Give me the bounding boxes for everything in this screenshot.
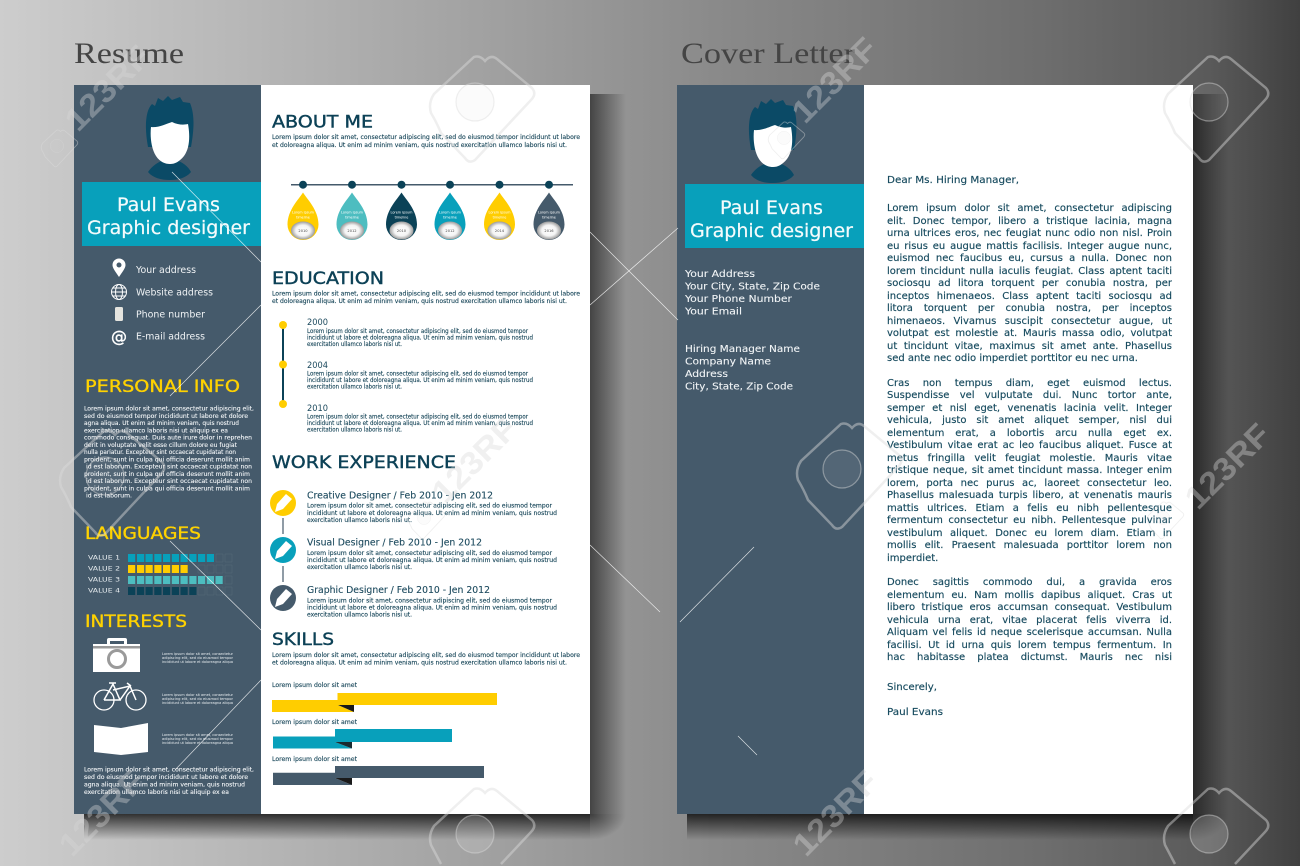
sidebar footer text: exercitation ullamco laboris nisi ut aliquip ex ea	[84, 789, 229, 796]
icon: pencil yellow	[270, 490, 296, 516]
timeline item 2014: timeline	[493, 216, 506, 220]
letter paragraph 1: Lorem ipsum dolor sit amet, consectetur adipiscing	[887, 203, 1172, 214]
skill bar teal: Lorem ipsum dolor sit amet	[272, 719, 358, 726]
letter paragraph 2: semper et nisl eget, venenatis lacinia velit. Integer	[887, 402, 1172, 414]
interests captions: Lorem ipsum dolor sit amet, consectetur	[162, 652, 234, 656]
timeline item 2012 teal: 2012	[445, 229, 455, 233]
title: Resume: Resume	[74, 37, 184, 70]
personal info text: proident, sunt in culpa qui officia deserunt mollit anim	[84, 485, 250, 492]
letter paragraph 1: elit. Donec tempor, libero a tristique lacinia, magna	[887, 216, 1172, 226]
languages chart: VALUE 4	[88, 586, 120, 594]
letter paragraph 2: mattis ultrices. Etiam a felis eu nibh pellentesque	[887, 502, 1172, 514]
timeline with drops	[288, 181, 573, 240]
unfilled grid	[198, 554, 232, 595]
interests captions: Lorem ipsum dolor sit amet, consectetur	[162, 733, 234, 737]
icon: location pin	[112, 259, 126, 277]
personal info text	[84, 406, 254, 500]
letter paragraph 1: ut tincidunt vitae, maximus sit amet ante. Phasellus	[887, 340, 1172, 352]
education intro: et doloreagna aliqua. Ut enim ad minim veniam, quis nostrud exercitation ullamco laboris nisi ut.	[272, 298, 567, 305]
job: visual designer: Visual Designer / Feb 2010 - Jen 2012	[307, 538, 482, 548]
heading: education: EDUCATION	[272, 269, 384, 289]
skills intro	[272, 652, 580, 666]
letter paragraph 1: sed ante nec odio imperdiet porttitor eu nec urna.	[887, 353, 1138, 364]
languages chart	[88, 554, 232, 595]
education entry 2004: exercitation ullamco laboris nisi ut.	[307, 384, 402, 390]
work connectors	[282, 518, 284, 582]
letter paragraph 1: lorem tincidunt nulla iaculis feugiat. Class aptent taciti	[887, 266, 1172, 276]
timeline item 2010: 2010	[298, 229, 308, 233]
letter paragraph 3: elementum eu. Nam mollis dapibus aliquet. Cras ut	[887, 590, 1172, 600]
icon: open book	[94, 723, 148, 755]
recipient address	[685, 344, 800, 392]
personal info text: id est laborum. Excepteur sint occaecat cupidatat non	[86, 478, 252, 485]
personal info text: commodo consequat. Duis aute irure dolor in reprehen	[84, 434, 252, 442]
sidebar footer text: sed do eiusmod tempor incididunt ut labore et dolore	[84, 774, 248, 781]
personal info text: Lorem ipsum dolor sit amet, consectetur adipiscing elit,	[84, 406, 254, 412]
personal info text: agna aliqua. Ut enim ad minim veniam, quis nostrud	[84, 420, 239, 427]
cover sidebar	[677, 85, 864, 814]
interests captions: adipiscing elit, sed do eiusmod tempor	[162, 656, 234, 660]
education entry 2010: incididunt ut labore et doloreagna aliqua. Ut enim ad minim veniam, quis nostrud	[307, 420, 533, 427]
job: graphic designer: exercitation ullamco laboris nisi ut.	[307, 612, 412, 618]
interests captions: adipiscing elit, sed do eiusmod tempor	[162, 737, 234, 741]
icon: camera	[93, 638, 140, 672]
letter paragraph 2: vehicula, justo sit amet aliquet semper, nisl dui	[887, 415, 1172, 426]
timeline item 2010: timeline	[296, 216, 310, 220]
about me text: et doloreagna aliqua. Ut enim ad minim veniam, quis nostrud exercitation ullamco laboris nisi ut.	[272, 142, 567, 149]
icon: phone	[115, 307, 123, 321]
letter paragraph 3: Donec sagittis commodo dui, a gravida eros	[887, 577, 1172, 588]
timeline item 2012: 2012	[347, 229, 357, 233]
education entry 2004	[307, 361, 533, 390]
name banner: Graphic designer	[87, 217, 250, 239]
job: graphic designer: Lorem ipsum dolor sit amet, consectetur adipiscing elit, sed do eiusmod tempor	[307, 598, 552, 604]
timeline item 2010 dark: 2010	[397, 229, 407, 233]
cover name banner: Graphic designer	[690, 220, 853, 242]
sidebar footer text	[84, 766, 254, 796]
letter paragraph 2: elementum erat, a lobortis arcu nulla eget ex.	[887, 428, 1172, 438]
letter paragraph 2: tristique neque, sit amet tincidunt massa. Integer enim	[887, 465, 1172, 476]
icon: pencil slate	[270, 585, 296, 611]
education entry 2004: Lorem ipsum dolor sit amet, consectetur adipiscing elit, sed do eiusmod tempor	[307, 370, 528, 378]
sign-off: Sincerely,	[887, 682, 937, 693]
sender address	[684, 269, 820, 318]
letter paragraph 1	[887, 203, 1172, 368]
sign-off: Paul Evans	[887, 707, 943, 718]
letter paragraph 1: urna ultrices eros, nec feugiat nunc odio non nisl. Proin	[887, 228, 1172, 239]
letter paragraph 2: Suspendisse vel vulputate dui. Nunc tortor ante,	[887, 390, 1172, 401]
job: visual designer: Lorem ipsum dolor sit amet, consectetur adipiscing elit, sed do eiusmod tempor	[307, 550, 552, 557]
job: visual designer	[307, 538, 557, 571]
job: creative designer	[307, 490, 557, 524]
watermark overlay: 123RF	[784, 30, 884, 130]
languages chart: VALUE 2	[88, 564, 120, 572]
watermark overlay: 123RF	[424, 410, 524, 510]
heading: interests: INTERESTS	[85, 612, 187, 632]
sign-off	[887, 682, 943, 718]
timeline item 2012 teal: Lorem ipsum	[439, 210, 462, 214]
letter paragraph 3: hac habitasse platea dictumst. Mauris nec nisi	[887, 652, 1172, 663]
contact list: Your address	[135, 265, 196, 276]
about me text: Lorem ipsum dolor sit amet, consectetur adipiscing elit, sed do eiusmod tempor incididunt ut labore	[272, 134, 580, 141]
education intro	[272, 290, 580, 305]
recipient address: Hiring Manager Name	[685, 344, 800, 355]
skill bar yellow	[272, 682, 497, 712]
sender address: Your Address	[684, 269, 755, 280]
letter paragraph 1: sociosqu ad litora torquent per conubia nostra, per	[887, 278, 1172, 289]
job: creative designer: Creative Designer / Feb 2010 - Jen 2012	[307, 490, 493, 502]
heading: about me: ABOUT ME	[272, 112, 373, 132]
timeline item 2014	[484, 181, 515, 240]
education entry 2010: exercitation ullamco laboris nisi ut.	[307, 426, 402, 434]
value 1 bar	[128, 554, 214, 562]
timeline item 2012	[336, 181, 368, 240]
personal info text: derit in voluptate velit esse cillum dolore eu fugiat	[84, 442, 238, 449]
contact list: E-mail address	[136, 332, 205, 342]
job: visual designer: exercitation ullamco laboris nisi ut.	[307, 564, 412, 571]
timeline item 2016: timeline	[542, 216, 556, 220]
resume card shadow	[84, 94, 626, 840]
job: graphic designer: Graphic Designer / Feb 2010 - Jen 2012	[307, 585, 490, 596]
about me text	[272, 134, 580, 149]
sender address: Your Phone Number	[684, 294, 793, 305]
education entry 2010: Lorem ipsum dolor sit amet, consectetur adipiscing elit, sed do eiusmod tempor	[307, 414, 528, 420]
letter paragraph 2: vestibulum aliquet. Donec eu lorem diam. Etiam in	[887, 528, 1172, 538]
interests captions: incididunt ut labore et doloreagna aliqua	[162, 660, 233, 664]
education entry 2010	[307, 404, 533, 434]
icon: at sign: @	[111, 327, 127, 346]
value 2 bar	[128, 565, 188, 573]
letter paragraph 2	[887, 378, 1172, 568]
interests captions: adipiscing elit, sed do eiusmod tempor	[162, 697, 234, 701]
personal info text: proident, sunt in culpa qui officia deserunt mollit anim	[84, 471, 250, 478]
letter paragraph 2: Cras non tempus diam, eget euismod lectus.	[887, 378, 1172, 388]
skill bar slate: Lorem ipsum dolor sit amet	[272, 756, 358, 763]
cover letter card shadow	[687, 94, 1229, 840]
recipient address: City, State, Zip Code	[685, 382, 793, 392]
letter paragraph 2: lorem, porta nec purus ac, laoreet consectetur leo.	[887, 478, 1172, 488]
personal info text: exercitation ullamco laboris nisi ut aliquip ex ea	[84, 427, 228, 434]
skill bar yellow: Lorem ipsum dolor sit amet	[272, 682, 358, 689]
letter paragraph 2: mollis elit. Praesent malesuada porttitor lorem non	[887, 540, 1172, 551]
interests captions: Lorem ipsum dolor sit amet, consectetur	[162, 693, 234, 697]
letter paragraph 3: vehicula urna erat, vitae placerat felis viverra id.	[887, 614, 1172, 626]
contact list: Phone number	[136, 310, 205, 320]
letter paragraph 1: volutpat est molestie at. Mauris massa odio, volutpat	[887, 328, 1172, 339]
icon: pencil teal	[270, 537, 296, 563]
education entry 2000: 2000	[307, 318, 328, 328]
education entry 2000: incididunt ut labore et doloreagna aliqua. Ut enim ad minim veniam, quis nostrud	[307, 334, 533, 342]
salutation: Dear Ms. Hiring Manager,	[887, 175, 1019, 186]
education entry 2000	[307, 318, 533, 348]
timeline item 2012: timeline	[345, 216, 359, 220]
heading: languages: LANGUAGES	[85, 524, 201, 544]
heading: work experience: WORK EXPERIENCE	[272, 453, 456, 473]
personal info text: sed do eiusmod tempor incididunt ut labore et dolore	[84, 413, 248, 420]
education entry 2004: incididunt ut labore et doloreagna aliqua. Ut enim ad minim veniam, quis nostrud	[307, 377, 533, 384]
recipient address: Address	[685, 369, 728, 380]
letter paragraph 1: litora torquent per conubia nostra, per inceptos	[887, 303, 1172, 314]
timeline item 2016: Lorem ipsum	[538, 210, 561, 214]
sender address: Your City, State, Zip Code	[684, 282, 820, 292]
timeline item 2010: Lorem ipsum	[292, 210, 315, 214]
icon: globe	[112, 284, 126, 300]
heading: skills: SKILLS	[272, 630, 334, 650]
job: visual designer: incididunt ut labore et doloreagna aliqua. Ut enim ad minim veniam, quis nostrud	[307, 557, 557, 564]
job: graphic designer	[307, 585, 557, 618]
cover name banner	[685, 184, 864, 248]
skills intro: Lorem ipsum dolor sit amet, consectetur adipiscing elit, sed do eiusmod tempor incididunt ut labore	[272, 652, 580, 659]
job: graphic designer: incididunt ut labore et doloreagna aliqua. Ut enim ad minim veniam, quis nostrud	[307, 604, 557, 612]
resume main white area	[261, 85, 590, 814]
education intro: Lorem ipsum dolor sit amet, consectetur adipiscing elit, sed do eiusmod tempor incididunt ut labore	[272, 290, 580, 298]
letter paragraph 3	[887, 577, 1172, 667]
panel: cover letter card	[677, 85, 1193, 814]
letter paragraph 1: himenaeos. Vivamus suscipit consectetur augue, ut	[887, 316, 1172, 326]
education entry 2000: exercitation ullamco laboris nisi ut.	[307, 341, 402, 348]
value 3 bar	[128, 576, 223, 584]
sender address: Your Email	[684, 306, 742, 318]
job: creative designer: exercitation ullamco laboris nisi ut.	[307, 517, 412, 524]
skills intro: et doloreagna aliqua. Ut enim ad minim veniam, quis nostrud exercitation ullamco laboris nisi ut.	[272, 660, 567, 666]
skill bar teal	[272, 719, 452, 748]
title: Cover Letter: Cover Letter	[681, 37, 855, 70]
timeline item 2010 dark: Lorem ipsum	[390, 210, 413, 214]
letter paragraph 2: fermentum consectetur eu nibh. Pellentesque pulvinar	[887, 515, 1172, 526]
letter paragraph 2: Phasellus malesuada turpis libero, at venenatis mauris	[887, 490, 1172, 501]
timeline item 2010	[288, 181, 318, 240]
languages chart: VALUE 1	[88, 554, 120, 562]
job: creative designer: incididunt ut labore et doloreagna aliqua. Ut enim ad minim veniam, quis nostrud	[307, 510, 557, 517]
personal info text: id est laborum.	[86, 492, 132, 500]
timeline item 2014: 2014	[495, 229, 505, 233]
cover main white area	[864, 85, 1193, 814]
watermark overlay: 123RF	[57, 38, 157, 138]
resume sidebar	[74, 85, 261, 814]
letter paragraph 3: facilisi. Ut id urna quis lorem tempus fermentum. In	[887, 640, 1172, 650]
letter paragraph 2: Vestibulum vitae erat ac leo faucibus aliquet. Fusce at	[887, 440, 1172, 451]
education entry 2010: 2010	[307, 404, 328, 414]
skill bar slate	[272, 756, 484, 785]
panel: resume card	[74, 85, 590, 814]
heading: personal info: PERSONAL INFO	[85, 377, 240, 397]
timeline item 2012 teal: timeline	[443, 216, 457, 220]
education entry 2004: 2004	[307, 361, 328, 371]
contact list	[111, 259, 213, 346]
interests captions: incididunt ut labore et doloreagna aliqua	[162, 701, 233, 705]
icon: resume avatar	[146, 96, 194, 180]
timeline item 2016	[534, 181, 564, 240]
letter paragraph 1: eu risus eu augue mattis facilisis. Integer augue nunc,	[887, 240, 1172, 252]
letter paragraph 1: inceptos himenaeos. Class aptent taciti sociosqu ad	[887, 290, 1172, 302]
education entry 2000: Lorem ipsum dolor sit amet, consectetur adipiscing elit, sed do eiusmod tempor	[307, 328, 528, 335]
sidebar footer text: agna aliqua. Ut enim ad minim veniam, quis nostrud	[84, 782, 245, 788]
letter paragraph 1: euismod nec faucibus eu, cursus a nulla. Donec non	[887, 253, 1172, 264]
name banner	[82, 182, 261, 246]
letter paragraph 2: imperdiet.	[887, 552, 938, 564]
recipient address: Company Name	[685, 356, 771, 368]
letter paragraph 2: metus fringilla velit feugiat molestie. Mauris vitae	[887, 452, 1172, 464]
timeline item 2012: Lorem ipsum	[341, 210, 364, 214]
timeline item 2014: Lorem ipsum	[488, 210, 511, 214]
letter paragraph 3: Aliquam vel felis id neque scelerisque accumsan. Nulla	[887, 627, 1172, 638]
icon: cover avatar	[749, 99, 796, 183]
personal info text: id est laborum. Excepteur sint occaecat cupidatat non	[86, 464, 252, 470]
value 4 bar	[128, 587, 196, 595]
name banner: Paul Evans	[117, 194, 220, 216]
languages chart: VALUE 3	[88, 576, 120, 584]
cover name banner: Paul Evans	[720, 197, 823, 219]
letter paragraph 3: libero tristique eros accumsan consequat. Vestibulum	[887, 602, 1172, 613]
icon: bicycle	[94, 683, 146, 710]
timeline item 2010 dark: timeline	[395, 216, 408, 220]
watermark overlay: 123RF	[1177, 416, 1277, 516]
interests captions	[162, 652, 234, 745]
job: creative designer: Lorem ipsum dolor sit amet, consectetur adipiscing elit, sed do eiusmod tempor	[307, 502, 552, 510]
timeline item 2016: 2016	[544, 229, 554, 233]
watermark overlay: 123RF	[51, 763, 151, 863]
sidebar footer text: Lorem ipsum dolor sit amet, consectetur adipiscing elit,	[84, 766, 254, 774]
timeline item 2012 teal	[434, 181, 466, 240]
personal info text: nulla pariatur. Excepteur sint occaecat cupidatat non	[84, 449, 236, 456]
personal info text: proident, sunt in culpa qui officia deserunt mollit anim	[84, 456, 250, 463]
education timeline	[279, 321, 287, 408]
timeline item 2010 dark	[386, 181, 417, 240]
interests captions: incididunt ut labore et doloreagna aliqua	[162, 741, 233, 745]
watermark overlay: 123RF	[785, 763, 885, 863]
contact list: Website address	[136, 288, 213, 298]
